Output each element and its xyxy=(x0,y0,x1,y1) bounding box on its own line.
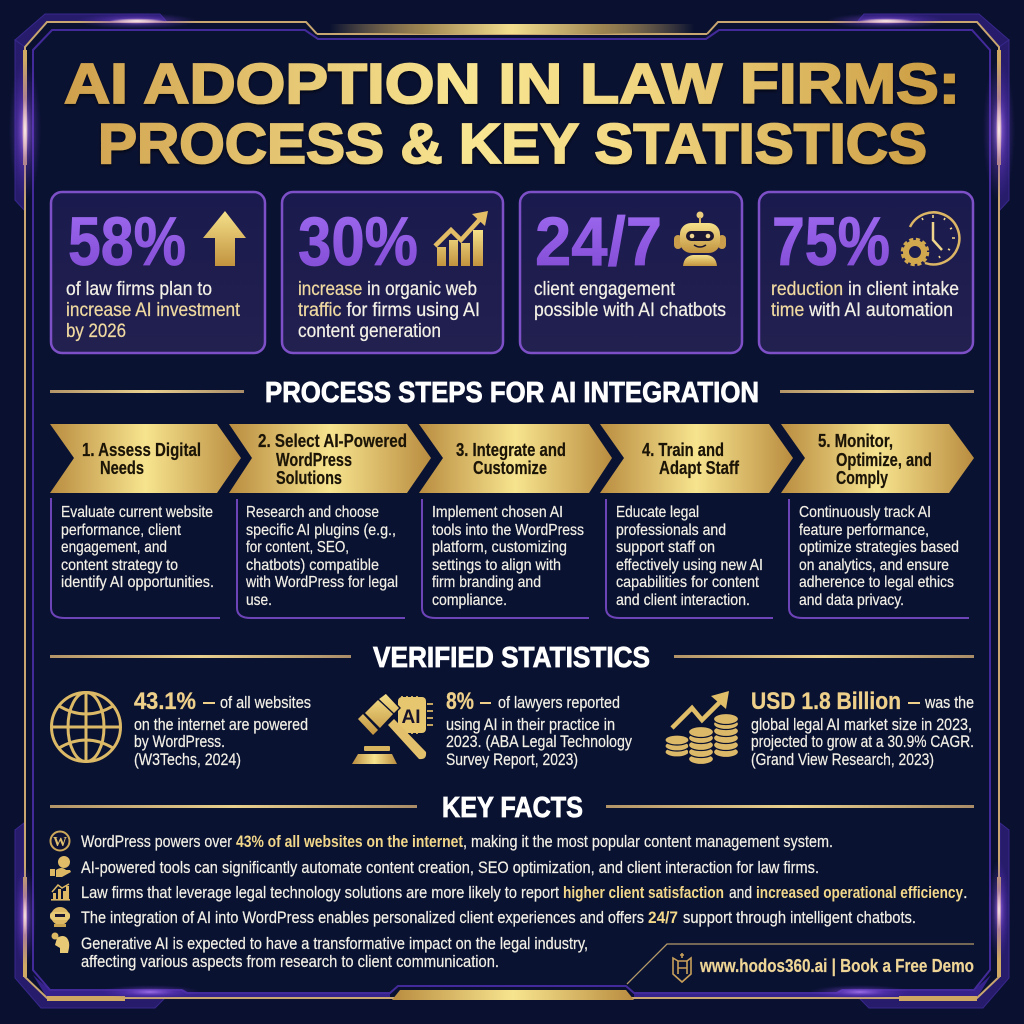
fact text: WordPress powers over xyxy=(81,833,232,851)
fact text xyxy=(81,935,588,971)
stat number: 75% xyxy=(772,203,890,280)
stat: legal AI market size xyxy=(665,688,974,769)
icon: head with gears xyxy=(52,932,69,953)
website link text: www.hodos360.ai | Book a Free Demo xyxy=(699,956,974,976)
step 1 description: Evaluate current website xyxy=(61,504,213,521)
step 3 label: 3. Integrate and xyxy=(456,440,566,460)
heading: process steps xyxy=(50,377,974,409)
stat text xyxy=(134,688,311,769)
step 4 description: professionals and xyxy=(616,522,726,539)
title: AI ADOPTION IN LAW FIRMS: xyxy=(64,52,960,116)
step 5 description xyxy=(799,504,959,609)
stat text: 2023. (ABA Legal Technology xyxy=(446,733,633,751)
step 1 description xyxy=(61,504,214,591)
step 1 label: Needs xyxy=(100,458,144,478)
stat text: projected to grow at a 30.9% CAGR. xyxy=(751,733,974,751)
step 2 description xyxy=(245,504,398,609)
stat text: by WordPress. xyxy=(134,733,225,751)
stat number: 58% xyxy=(68,203,186,280)
call to action xyxy=(627,944,974,984)
title xyxy=(64,52,960,176)
step 3 description: settings to align with xyxy=(432,557,561,574)
step 1 bracket xyxy=(51,498,220,618)
fact text: affecting various aspects from research to client communication. xyxy=(81,953,499,971)
stat text: global legal AI market size in 2023, xyxy=(751,716,972,734)
stat description: of law firms plan to xyxy=(66,278,212,300)
step 5 description: and data privacy. xyxy=(799,592,904,609)
stat description: traffic for firms using AI xyxy=(298,299,480,321)
step 1 description: performance, client xyxy=(61,522,181,539)
step 2 label: Solutions xyxy=(276,468,342,488)
key fact 4 xyxy=(50,907,916,927)
process step 1 xyxy=(50,424,241,618)
process step 5 xyxy=(781,424,974,618)
stat description: by 2026 xyxy=(66,320,126,342)
stat text: Survey Report, 2023) xyxy=(446,751,578,769)
step 2 description: for content, SEO, xyxy=(246,539,349,556)
step 4 bracket xyxy=(606,499,773,618)
step 4 description: and client interaction. xyxy=(616,592,750,609)
process step 3 xyxy=(419,424,612,618)
stat description: reduction in client intake xyxy=(771,278,959,300)
step 1 description: identify AI opportunities. xyxy=(61,574,214,591)
fact text: higher client satisfaction xyxy=(563,884,724,902)
stat text xyxy=(446,688,633,769)
step 4 description xyxy=(616,504,763,609)
stat text: on the internet are powered xyxy=(134,716,308,734)
fact text: support through intelligent chatbots. xyxy=(683,909,916,927)
fact text: and xyxy=(729,884,752,902)
panel: stat card 30% xyxy=(282,192,503,353)
step 3 description: platform, customizing xyxy=(432,539,567,556)
arrow: step 5 xyxy=(781,424,974,493)
icon: robot xyxy=(674,212,726,266)
icon: gavel with AI chip: AI xyxy=(402,707,420,728)
stat description: client engagement xyxy=(534,278,676,300)
fact text xyxy=(81,833,833,851)
step 4 label: 4. Train and xyxy=(642,440,724,460)
step 3 description: firm branding and xyxy=(432,574,541,591)
stat number: 24/7 xyxy=(535,203,662,280)
key fact 2 xyxy=(50,856,819,877)
step 5 bracket xyxy=(789,499,969,618)
stat description: increase in organic web xyxy=(298,278,477,300)
fact text xyxy=(81,884,968,902)
stat description: increase AI investment xyxy=(66,299,241,321)
step 5 description: optimize strategies based xyxy=(799,539,959,556)
process step 4 xyxy=(600,424,793,618)
icon: coins with rising arrow xyxy=(665,691,738,764)
stat text: using AI in their practice in xyxy=(446,716,615,734)
step 5 label xyxy=(818,431,932,488)
step 5 label: 5. Monitor, xyxy=(818,431,893,451)
step 5 description: feature performance, xyxy=(799,522,929,539)
process step 2 xyxy=(229,424,431,618)
heading: verified statistics: VERIFIED STATISTICS xyxy=(373,642,650,674)
step 3 description xyxy=(432,504,584,609)
key fact 5 xyxy=(52,932,588,971)
arrow: step 3 xyxy=(419,424,612,493)
title: PROCESS & KEY STATISTICS xyxy=(98,112,927,176)
fact text: AI-powered tools can significantly automate content creation, SEO optimization, and client interaction for law firms. xyxy=(81,859,819,877)
icon: growth chart xyxy=(435,211,488,266)
icon: clock with gear xyxy=(902,212,959,264)
stat text: (Grand View Research, 2023) xyxy=(751,751,934,769)
step 2 description: use. xyxy=(246,592,272,609)
step 1 description: engagement, and xyxy=(61,539,167,556)
step 2 description: chatbots) compatible xyxy=(246,557,379,574)
icon: gavel with AI chip xyxy=(352,693,433,764)
icon: WordPress xyxy=(50,832,70,850)
fact text: Generative AI is expected to have a transformative impact on the legal industry, xyxy=(81,935,588,953)
arrow: step 4 xyxy=(600,424,793,493)
step 5 description: on analytics, and ensure xyxy=(799,557,949,574)
key fact 1 xyxy=(50,832,833,851)
stat text: was the xyxy=(924,694,974,712)
step 2 description: specific AI plugins (e.g., xyxy=(246,522,396,539)
stat: lawyers using AI xyxy=(352,688,633,769)
stat text: of lawyers reported xyxy=(498,694,620,712)
step 1 label xyxy=(82,440,201,478)
step 2 description: with WordPress for legal xyxy=(245,574,398,591)
fact text: 24/7 xyxy=(648,909,678,927)
step 4 label: Adapt Staff xyxy=(659,458,740,478)
fact text: , making it the most popular content management system. xyxy=(463,833,833,851)
arrow: step 2 xyxy=(229,424,431,493)
step 1 description: content strategy to xyxy=(61,557,178,574)
heading: key facts: KEY FACTS xyxy=(442,792,583,824)
fact text: increased operational efficiency xyxy=(756,884,964,902)
icon: hand with coin xyxy=(50,856,71,877)
icon: shield logo xyxy=(673,953,691,982)
heading: process steps: PROCESS STEPS FOR AI INTEGRATION xyxy=(265,377,759,409)
step 4 description: Educate legal xyxy=(616,504,699,521)
step 3 description: compliance. xyxy=(432,592,507,609)
stat description xyxy=(771,278,959,321)
icon: small chart xyxy=(51,884,70,901)
fact text: 43% of all websites on the internet xyxy=(236,833,463,851)
step 3 label: Customize xyxy=(473,458,547,478)
icon: WordPress: W xyxy=(53,835,67,850)
stat description: possible with AI chatbots xyxy=(534,299,726,321)
step 3 description: Implement chosen AI xyxy=(432,504,563,521)
step 1 label: 1. Assess Digital xyxy=(82,440,201,460)
fact text: The integration of AI into WordPress enables personalized client experiences and offers xyxy=(81,909,644,927)
fact text: Law firms that leverage legal technology solutions are more likely to report xyxy=(81,884,559,902)
step 3 label xyxy=(456,440,566,478)
fact text: . xyxy=(963,884,968,902)
step 4 label xyxy=(642,440,740,478)
step 4 description: capabilities for content xyxy=(616,574,759,591)
step 5 description: adherence to legal ethics xyxy=(799,574,954,591)
panel: stat card 58% xyxy=(51,192,265,353)
step 2 label: WordPress xyxy=(276,450,352,470)
step 5 label: Comply xyxy=(836,468,888,488)
key fact 3 xyxy=(51,884,968,902)
arrow: step 1 xyxy=(50,424,241,493)
stat text: 43.1% xyxy=(134,688,196,715)
stat text: USD 1.8 Billion xyxy=(751,688,901,715)
step 5 description: Continuously track AI xyxy=(799,504,931,521)
stat text: of all websites xyxy=(220,694,311,712)
stat number: 30% xyxy=(298,203,418,280)
panel: stat card 75% xyxy=(759,192,973,353)
step 4 description: effectively using new AI xyxy=(616,557,763,574)
step 2 bracket xyxy=(237,499,405,618)
icon: support xyxy=(50,907,70,927)
stat text xyxy=(751,688,974,769)
stat description xyxy=(534,278,726,321)
stat: WordPress share xyxy=(51,688,311,769)
stat description xyxy=(298,278,480,342)
stat description: content generation xyxy=(298,320,441,342)
step 2 description: Research and choose xyxy=(246,504,379,521)
stat description xyxy=(66,278,241,342)
icon: up arrow xyxy=(203,211,246,266)
heading: key facts xyxy=(50,792,974,824)
step 3 description: tools into the WordPress xyxy=(432,522,584,539)
stat text: 8% xyxy=(446,688,474,715)
icon: globe xyxy=(51,692,121,762)
step 4 description: support staff on xyxy=(616,539,715,556)
step 2 label xyxy=(258,431,407,488)
stat description: time with AI automation xyxy=(771,299,953,321)
heading: verified statistics xyxy=(50,642,974,674)
step 3 bracket xyxy=(422,499,589,618)
panel: stat card 24/7 xyxy=(520,192,742,353)
step 5 label: Optimize, and xyxy=(836,450,932,470)
step 2 label: 2. Select AI-Powered xyxy=(258,431,407,451)
stat text: (W3Techs, 2024) xyxy=(134,751,241,769)
